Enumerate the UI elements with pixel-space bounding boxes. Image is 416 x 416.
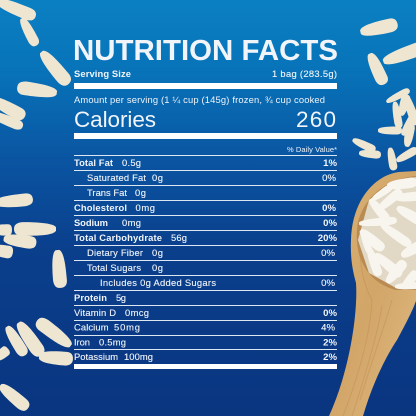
row: iron: [74, 336, 337, 348]
row: sodium: 0mg: [122, 217, 141, 228]
row: vitamin d: 0%: [323, 308, 337, 319]
daily value header: % Daily Value*: [287, 145, 337, 154]
row: saturated fat: 0%: [322, 173, 336, 184]
row: total fat: 1%: [323, 158, 337, 169]
rice grains right: [351, 17, 416, 171]
bottom thick bar: [74, 364, 337, 369]
row: iron: 0.5mg: [99, 336, 126, 348]
row: cholesterol: 0%: [322, 203, 336, 214]
row: sodium: [74, 217, 337, 229]
row: dietary fiber: Dietary Fiber: [87, 247, 143, 258]
row: potassium: [74, 351, 337, 363]
row: sodium: Sodium: [74, 217, 108, 228]
title: NUTRITION FACTS: [73, 35, 338, 67]
row: dietary fiber: 0g: [152, 247, 163, 258]
row: calcium: Calcium: [74, 322, 109, 332]
row: vitamin d: 0mcg: [125, 307, 149, 318]
row: protein: Protein: [74, 292, 107, 303]
row: potassium: 100mg: [124, 351, 153, 362]
row dividers: [74, 155, 337, 350]
row: protein: [74, 292, 126, 303]
row: total carbohydrate: Total Carbohydrate: [74, 232, 162, 243]
serving size value: 1 bag (283.5g): [272, 68, 337, 79]
row: iron: Iron: [74, 336, 90, 348]
row: total carbohydrate: 20%: [318, 233, 337, 244]
rice grains left: [0, 0, 75, 413]
rice in spoon grains: [357, 177, 416, 291]
nutrition facts panel: [73, 35, 338, 369]
row: total carbohydrate: [74, 232, 337, 244]
row: iron: 2%: [323, 338, 337, 348]
row: cholesterol: Cholesterol: [74, 202, 127, 213]
row: dietary fiber: [87, 247, 335, 259]
row: cholesterol: [74, 202, 336, 214]
top thick bar: [74, 83, 337, 89]
row: potassium: Potassium: [74, 351, 118, 362]
row: total fat: Total Fat: [74, 157, 113, 168]
row: total sugars: Total Sugars: [87, 262, 141, 273]
row: saturated fat: [87, 172, 336, 184]
row: dietary fiber: 0%: [321, 248, 335, 259]
row: vitamin d: [74, 307, 337, 319]
row: cholesterol: 0mg: [136, 202, 155, 213]
row: added sugars: [100, 277, 335, 289]
middle thick bar: [74, 133, 337, 139]
rice mass: [358, 177, 416, 288]
row: saturated fat: Saturated Fat: [87, 172, 146, 183]
spoon wood streaks: [343, 250, 392, 416]
amount per serving: Amount per serving (1 ¼ cup (145g) frozen, ¾ cup cooked: [74, 94, 325, 105]
row: saturated fat: 0g: [152, 172, 163, 183]
row: added sugars: Includes 0g Added Sugars: [100, 277, 216, 288]
row: total fat: 0.5g: [122, 157, 141, 168]
row: trans fat: Trans Fat: [87, 187, 127, 198]
row: protein: 5g: [116, 292, 126, 303]
row: calcium: [74, 322, 335, 334]
row: sodium: 0%: [323, 218, 337, 229]
row: calcium: 50mg: [114, 322, 140, 332]
calories value: 260: [296, 107, 336, 132]
row: total sugars: 0g: [152, 262, 163, 273]
row: vitamin d: Vitamin D: [74, 307, 116, 318]
calories label: Calories: [74, 107, 156, 132]
row: total carbohydrate: 56g: [171, 232, 187, 243]
row: total fat: [74, 157, 337, 169]
serving size label: Serving Size: [74, 68, 131, 79]
row: added sugars: 0%: [321, 278, 335, 289]
row: trans fat: 0g: [135, 187, 146, 198]
spoon hollow: [357, 176, 416, 290]
row: trans fat: [87, 187, 146, 198]
row: calcium: 4%: [321, 322, 335, 334]
row: potassium: 2%: [323, 352, 337, 363]
wooden spoon with rice: [329, 171, 416, 416]
spoon body: [329, 171, 416, 416]
